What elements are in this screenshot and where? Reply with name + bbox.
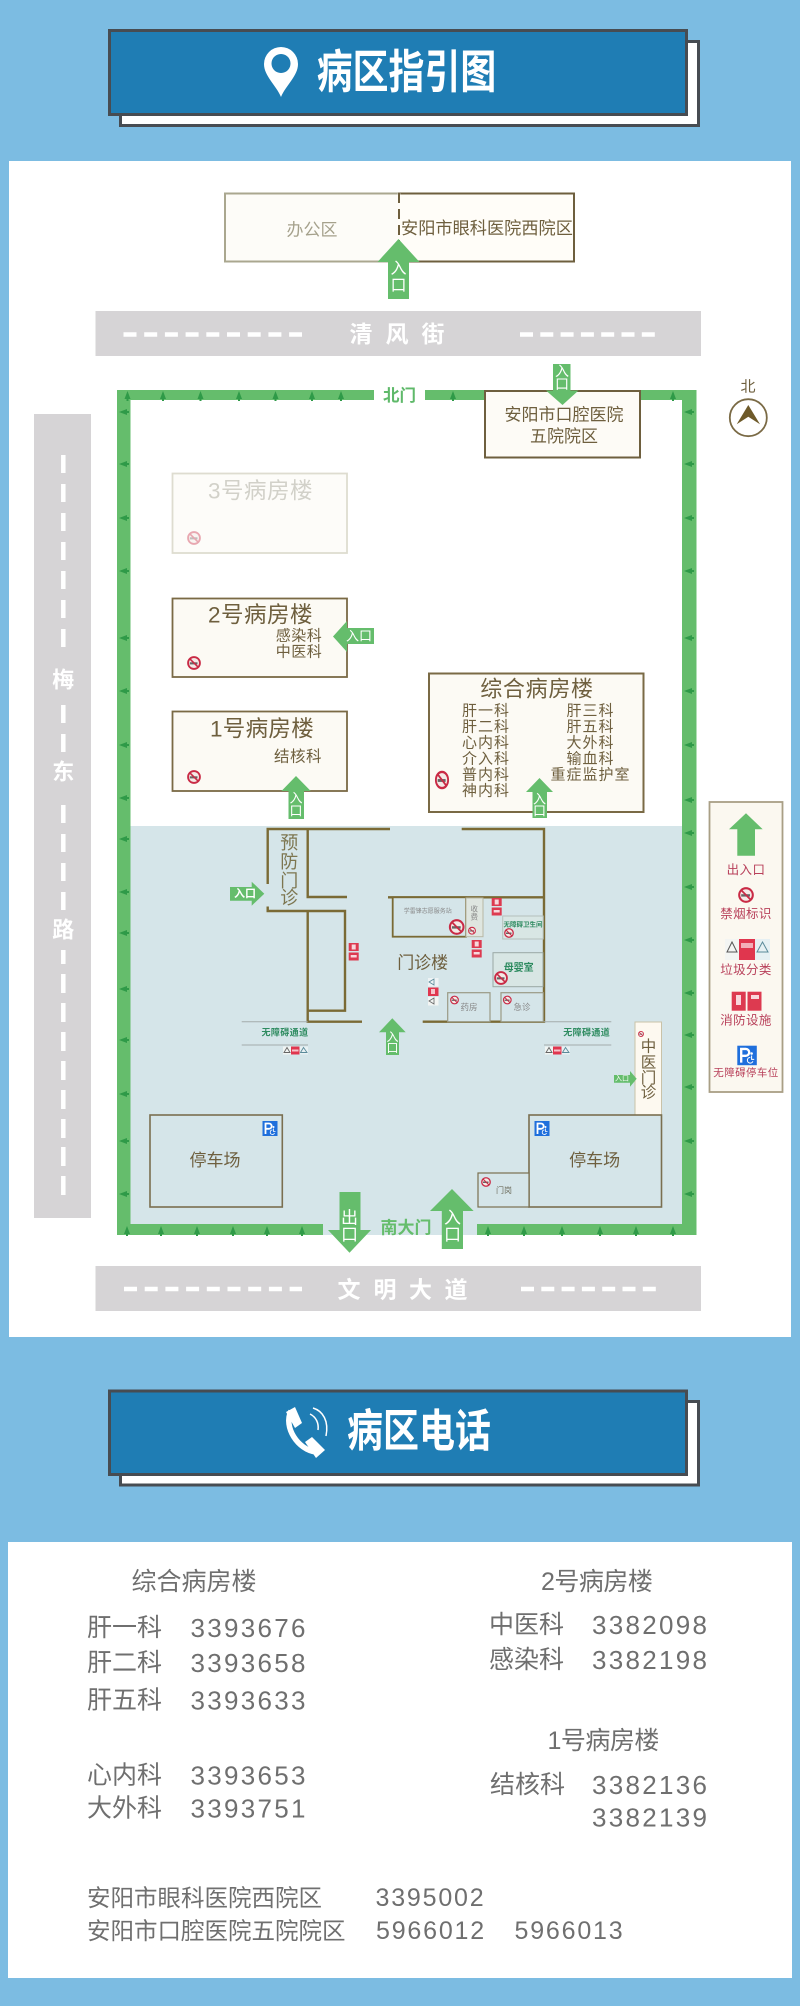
phone group: 1号病房楼: 3382139	[592, 1802, 709, 1832]
phone group: 2号病房楼: 3382198	[592, 1645, 709, 1675]
phone group: 2号病房楼: 中医科	[489, 1611, 564, 1639]
panel: map	[9, 161, 791, 1337]
building: 中医门诊: 医	[641, 1054, 656, 1072]
building: 中医门诊: 诊	[641, 1084, 657, 1102]
parking left	[150, 1115, 282, 1207]
phone group: other campuses: 安阳市口腔医院五院院区	[87, 1918, 346, 1944]
phone group: 综合病房楼: 3393653	[190, 1760, 308, 1790]
legend panel: 禁烟标识	[720, 907, 772, 921]
legend panel: 垃圾分类	[720, 962, 772, 977]
arrow: eye hospital entrance: 入	[390, 260, 407, 278]
parking left: 停车场	[190, 1151, 240, 1170]
arrow: 中医门诊 entrance	[614, 1071, 637, 1087]
road: 梅东路: 梅	[52, 668, 74, 692]
phone group: 1号病房楼: 结核科	[490, 1771, 565, 1799]
phone group: 综合病房楼: 肝一科	[87, 1614, 162, 1642]
compass: 北	[740, 378, 756, 396]
dental hospital block	[485, 391, 640, 458]
parking right: 停车场	[569, 1151, 620, 1170]
south gate label: 南大门	[380, 1218, 432, 1238]
phone group: other campuses: 5966012	[376, 1917, 486, 1945]
phone group: other campuses: 3395002	[376, 1884, 485, 1912]
heading: 病区指引图	[110, 30, 698, 126]
outpatient building walls	[268, 829, 544, 1022]
gatehouse: 门岗	[496, 1185, 512, 1195]
compass	[730, 378, 767, 436]
arrow: 2号 entrance	[333, 621, 374, 652]
arrow: south entrance: 口	[444, 1226, 461, 1244]
phone group: 综合病房楼: 3393751	[190, 1794, 308, 1824]
arrow: dental hospital entrance: 入	[555, 363, 569, 379]
arrow: 预防门诊 entrance: 入口	[234, 887, 256, 900]
phone group: 2号病房楼: 感染科	[489, 1646, 564, 1674]
hospital ground blue zone	[130, 826, 683, 1235]
office block	[225, 194, 399, 262]
arrow: 1号 entrance	[282, 776, 311, 819]
text: 预防门诊: 预	[280, 833, 298, 853]
building: 综合病房楼: 心内科	[462, 734, 510, 752]
dental hospital block: 安阳市口腔医院	[504, 406, 624, 424]
heading: 病区指引图: 病区指引图	[317, 47, 496, 98]
dental hospital block: 五院院区	[530, 427, 598, 446]
phone group: 2号病房楼	[489, 1568, 709, 1675]
room: 收费: 费	[471, 912, 479, 922]
arrow: eye hospital entrance: 口	[390, 278, 407, 294]
building: 综合病房楼: 大外科	[566, 734, 615, 752]
eye hospital west block	[399, 193, 574, 262]
building: 1号病房楼: 1号病房楼	[210, 716, 314, 742]
phone group: 综合病房楼: 肝五科	[87, 1686, 162, 1714]
room: 无障碍卫生间: 无障碍卫生间	[504, 920, 543, 928]
road: 文明大道	[96, 1266, 701, 1311]
phone group: 1号病房楼	[490, 1727, 709, 1832]
phone group: 综合病房楼: 3393633	[190, 1686, 308, 1716]
gatehouse	[478, 1173, 529, 1207]
building: 综合病房楼: 肝一科	[462, 702, 510, 720]
arrow: 预防门诊 entrance	[230, 882, 264, 906]
arrow: 综合 entrance: 入	[533, 792, 546, 806]
building: 中医门诊	[635, 1022, 662, 1115]
legend panel	[710, 802, 782, 1092]
text: 预防门诊: 防	[280, 852, 298, 872]
text: 预防门诊: 诊	[280, 888, 298, 908]
room: 母婴室	[493, 953, 543, 987]
building: 1号病房楼	[172, 712, 347, 791]
building: 中医门诊: 中	[641, 1038, 656, 1056]
arrow: dental hospital entrance	[546, 363, 578, 405]
text: 预防门诊: 门	[280, 871, 298, 891]
road: 文明大道: 文	[338, 1276, 360, 1302]
room: 药房: 药房	[460, 1002, 478, 1012]
building: 综合病房楼	[429, 674, 644, 812]
arrow: 综合 entrance	[526, 778, 553, 818]
room: 急诊: 急诊	[513, 1002, 531, 1012]
office block: 办公区	[286, 220, 338, 240]
green perimeter wall with trees	[117, 390, 696, 1236]
phone group: 1号病房楼: 3382136	[592, 1770, 709, 1800]
icon: fire equipment	[349, 943, 359, 960]
phone group: other campuses: 安阳市眼科医院西院区	[87, 1885, 322, 1911]
phone group: 1号病房楼: 1号病房楼	[548, 1727, 659, 1755]
phone group: 综合病房楼: 综合病房楼	[132, 1568, 257, 1596]
parking right	[529, 1115, 662, 1207]
building: 2号病房楼: 中医科	[276, 644, 322, 660]
arrow: 中医门诊 entrance: 入口	[615, 1074, 629, 1082]
icon: phone	[286, 1407, 327, 1458]
road: 梅东路: 路	[52, 918, 74, 942]
phone group: 综合病房楼: 大外科	[87, 1794, 162, 1822]
room: 学雷锋志愿服务站: 学雷锋志愿服务站	[404, 907, 452, 915]
arrow: 1号 entrance: 入	[289, 790, 303, 806]
legend panel: 无障碍停车位	[713, 1066, 779, 1079]
building: 综合病房楼: 重症监护室	[550, 766, 631, 784]
arrow: outpatient entrance	[379, 1018, 406, 1055]
building: 3号病房楼: 3号病房楼	[208, 478, 313, 504]
room: 母婴室: 母婴室	[504, 961, 534, 974]
heading: 病区电话	[110, 1391, 698, 1485]
arrow: 2号 entrance: 入口	[346, 628, 372, 644]
phone group: 综合病房楼: 肝二科	[87, 1649, 162, 1677]
icon: fire equipment	[472, 940, 482, 958]
phone group: 综合病房楼: 心内科	[87, 1762, 162, 1790]
accessible passage right	[544, 1022, 611, 1054]
accessible passage left: 无障碍通道	[261, 1026, 309, 1038]
room: 收费	[466, 898, 483, 937]
arrow: south exit	[328, 1192, 371, 1253]
building: 2号病房楼: 2号病房楼	[208, 602, 313, 628]
phone group: 综合病房楼: 3393658	[190, 1648, 308, 1678]
road: 文明大道: 大	[409, 1276, 432, 1302]
phone group: 2号病房楼: 2号病房楼	[541, 1568, 652, 1596]
road: 文明大道: 道	[444, 1276, 468, 1302]
accessible passage right: 无障碍通道	[563, 1026, 610, 1038]
phone group: 2号病房楼: 3382098	[592, 1610, 709, 1640]
eye hospital west block: 安阳市眼科医院西院区	[401, 218, 573, 238]
building: 综合病房楼: 综合病房楼	[480, 676, 594, 702]
road: 清风街: 风	[386, 321, 408, 347]
road: 清风街	[96, 311, 701, 356]
road: 梅东路: 东	[52, 760, 74, 784]
arrow: outpatient entrance: 口	[386, 1041, 399, 1055]
arrow: dental hospital entrance: 口	[555, 376, 569, 392]
room: 学雷锋志愿服务站	[393, 897, 466, 937]
room: 无障碍卫生间	[503, 916, 543, 939]
building: 2号病房楼: 感染科	[276, 628, 322, 644]
building: 综合病房楼: 输血科	[566, 750, 615, 768]
phone group: other campuses: 5966013	[514, 1917, 624, 1945]
room: 收费: 收	[471, 904, 479, 914]
building: 中医门诊: 门	[641, 1069, 656, 1087]
road: 清风街: 街	[422, 321, 444, 347]
text: 门诊楼: 门诊楼	[397, 954, 448, 972]
arrow: south exit: 出	[341, 1208, 358, 1228]
arrow: south entrance: 入	[444, 1208, 461, 1228]
building: 综合病房楼: 肝三科	[566, 702, 615, 720]
legend panel: 出入口	[727, 863, 765, 877]
arrow: south entrance	[430, 1189, 474, 1249]
building: 2号病房楼	[172, 598, 347, 677]
building: 综合病房楼: 介入科	[462, 750, 510, 768]
building: 综合病房楼: 肝二科	[462, 718, 510, 736]
phone group: other campuses	[87, 1884, 624, 1945]
road: 清风街: 清	[350, 321, 372, 347]
legend panel: 消防设施	[720, 1013, 772, 1028]
icon: fire equipment	[492, 898, 502, 916]
road: 梅东路	[34, 414, 91, 1218]
panel: phone numbers	[8, 1542, 792, 1978]
text: 预防门诊	[280, 833, 298, 908]
phone group: 综合病房楼	[87, 1568, 308, 1824]
room: 急诊	[501, 993, 543, 1022]
building: 综合病房楼: 肝五科	[566, 718, 615, 736]
building: 综合病房楼: 神内科	[462, 782, 510, 800]
room: 药房	[448, 993, 490, 1022]
arrow: south exit: 口	[341, 1226, 358, 1244]
building: 1号病房楼: 结核科	[274, 748, 322, 766]
icon: waste sorting column	[428, 978, 438, 1006]
building: 综合病房楼: 普内科	[462, 766, 510, 784]
legend arrow	[729, 813, 763, 856]
arrow: 综合 entrance: 口	[533, 804, 546, 818]
phone group: 综合病房楼: 3393676	[190, 1613, 308, 1643]
north gate label: 北门	[383, 386, 416, 405]
arrow: outpatient entrance: 入	[386, 1030, 399, 1044]
accessible passage left	[242, 1022, 309, 1054]
road: 文明大道: 明	[374, 1276, 396, 1302]
heading: 病区电话: 病区电话	[347, 1406, 491, 1456]
arrow: eye hospital entrance	[378, 239, 420, 299]
arrow: 1号 entrance: 口	[289, 804, 303, 818]
building: 3号病房楼	[172, 474, 347, 553]
